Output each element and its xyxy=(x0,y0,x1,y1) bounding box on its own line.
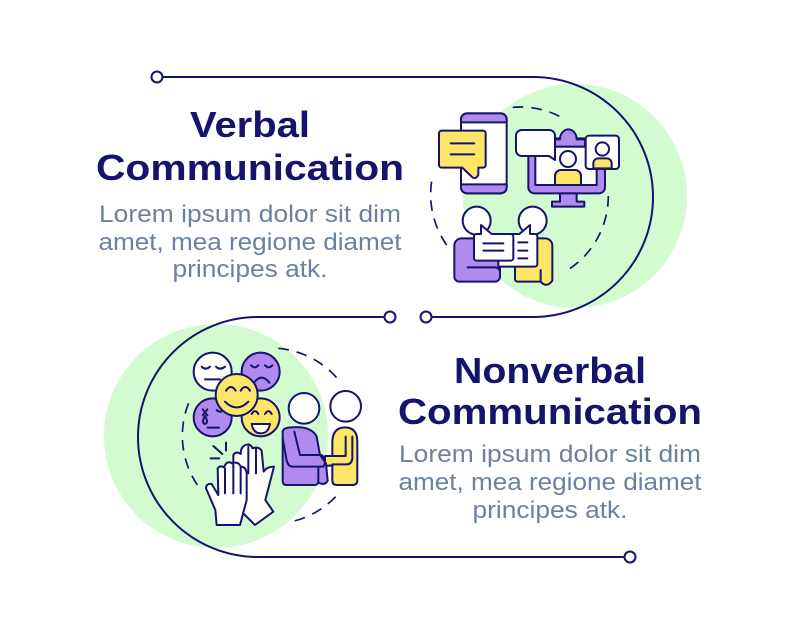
heading: nonverbal communication: Nonverbal xyxy=(454,350,646,391)
icon: neutral face xyxy=(194,353,232,391)
icon: handshake people xyxy=(283,391,361,485)
text block: nonverbal: amet, mea regione diamet xyxy=(398,469,702,496)
icon: smartphone xyxy=(461,113,507,193)
icon: crying face xyxy=(194,398,232,436)
icon group: nonverbal communication xyxy=(182,348,361,525)
icon: sad face xyxy=(242,353,280,391)
dashed ring: verbal xyxy=(431,107,608,272)
icon: chat bubble xyxy=(439,131,486,178)
text block: verbal: amet, mea regione diamet xyxy=(98,229,402,256)
connector line: bottom xyxy=(138,312,636,562)
icon: two people talking xyxy=(454,207,552,285)
green circle: top xyxy=(463,84,687,308)
text block: verbal: principes atk. xyxy=(172,256,328,283)
icon group: verbal communication xyxy=(431,107,619,285)
icon: laughing face xyxy=(242,398,280,436)
icon: video call monitor xyxy=(516,129,619,207)
text block: nonverbal: Lorem ipsum dolor sit dim xyxy=(399,441,701,468)
text block: nonverbal: principes atk. xyxy=(472,497,628,524)
heading: nonverbal communication: Communication xyxy=(398,391,702,432)
heading: verbal communication: Communication xyxy=(96,147,404,188)
dashed ring: nonverbal xyxy=(182,348,340,522)
icon: sparks xyxy=(211,443,226,458)
connector line: top xyxy=(152,72,653,322)
icon: back hand xyxy=(233,444,274,525)
green circle: bottom xyxy=(104,324,328,548)
icon: smiling face xyxy=(216,374,258,416)
heading: verbal communication: Verbal xyxy=(190,104,310,145)
text block: verbal: Lorem ipsum dolor sit dim xyxy=(99,201,401,228)
icon: front hand xyxy=(206,462,247,525)
